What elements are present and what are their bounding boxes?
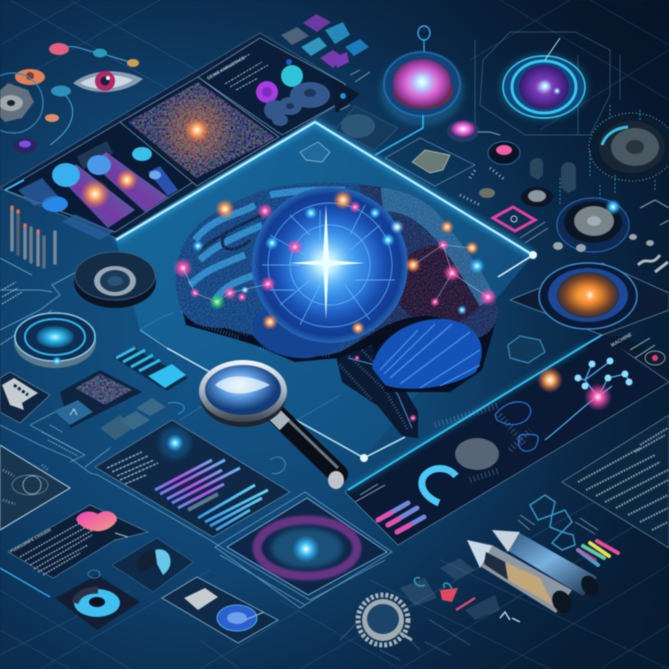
- icon: gear: [0, 73, 43, 133]
- icon: eye: [73, 71, 143, 92]
- bottom sketches: [340, 558, 520, 660]
- small emblem top of band: [508, 336, 545, 363]
- violet orb: [499, 38, 589, 121]
- top small tiles: [281, 14, 369, 68]
- fingerprint disc: [455, 438, 499, 470]
- panel: circular diagram left: [0, 445, 70, 530]
- heading: panel title: GENIC ANNUSTACE: [206, 55, 246, 81]
- node: teal: [93, 48, 107, 58]
- dark lens top right: [589, 113, 669, 181]
- cyan stripe: [0, 568, 50, 597]
- icon: hexagon molecule: [530, 495, 575, 550]
- icon: magnifying glass: [199, 360, 344, 489]
- panel: top-left dark band: [0, 33, 345, 240]
- squiggle icon: [638, 255, 668, 272]
- panel: orange lens: [510, 263, 669, 335]
- colored bars: [578, 541, 618, 565]
- heading: card title: PUDIGUINIFE CASUDN: [9, 527, 52, 554]
- data tile cluster: [54, 370, 184, 440]
- panel: central diamond: [116, 122, 537, 462]
- panel: particle heat map: [120, 76, 280, 187]
- pink square icon: [493, 207, 548, 243]
- brain cortex: [176, 182, 498, 356]
- pink orb: [375, 26, 464, 155]
- icon: brain emblem: [412, 150, 450, 173]
- node: orange ring: [15, 69, 45, 85]
- icon: gears: [264, 82, 330, 126]
- neuron tree: [537, 358, 632, 440]
- node: purple: [13, 138, 37, 154]
- small card right: [640, 200, 669, 225]
- bar cylinders: [12, 207, 55, 267]
- panel: lens tile: [162, 577, 278, 643]
- cerebellum: [372, 319, 482, 389]
- central circuit sphere: [252, 187, 408, 343]
- glowing band edge: [348, 335, 602, 490]
- arc marker: [270, 457, 285, 474]
- pen: blue: [492, 530, 602, 600]
- text scraps: [518, 515, 598, 534]
- brain: [170, 175, 505, 438]
- panel: lower right dark band: [345, 335, 669, 545]
- small pink orb: [447, 120, 500, 142]
- pen: tan: [467, 540, 576, 617]
- lens: dark: [74, 252, 156, 308]
- lens small grey: [521, 187, 553, 207]
- node: teal large: [51, 86, 71, 96]
- dot cloud: [435, 405, 530, 480]
- bars: [378, 503, 424, 532]
- panel: chart with glowing pills: [5, 122, 196, 240]
- small list: [42, 425, 80, 456]
- brain stem: [335, 345, 418, 438]
- panel: pie tile: [112, 538, 193, 592]
- left mid frames: [0, 258, 80, 345]
- panel: small top right card: [600, 332, 669, 378]
- circuit frame: [475, 32, 620, 135]
- panel: data bars: [95, 420, 290, 537]
- label: card title: MACHINE: [610, 332, 634, 349]
- panel: text and gears: [198, 38, 345, 135]
- icon: cog: [358, 595, 412, 645]
- lens: grey: [557, 198, 629, 252]
- wires with dots: [560, 105, 655, 205]
- icon tile: white blocks panel: [0, 372, 50, 423]
- node: orange small: [45, 114, 59, 122]
- lens: cyan: [14, 313, 96, 368]
- glowing panel edge: [116, 122, 533, 255]
- panel: text document: [562, 415, 669, 548]
- dark dotted underside: [178, 290, 497, 392]
- ornament: [479, 188, 495, 198]
- small bolts row: [553, 234, 654, 252]
- panel: donut tile: [55, 570, 140, 630]
- top centre icon: small brain sketch: [300, 142, 330, 162]
- panel: galaxy: [215, 492, 392, 608]
- small icon frame: [385, 138, 475, 186]
- node: pink: [49, 43, 69, 55]
- figures: [530, 158, 576, 193]
- lower lobe: [253, 305, 344, 358]
- hand outline: [495, 402, 538, 451]
- panel and small icons upper middle: [335, 70, 398, 150]
- left icons cluster: [0, 43, 143, 154]
- panel: heart card: [8, 505, 148, 578]
- node: gold: [127, 59, 139, 67]
- mini list: [2, 282, 22, 304]
- dots and small marks: [460, 168, 505, 205]
- thin frame lines: [0, 412, 385, 605]
- node glows: [173, 190, 497, 335]
- cyan bar tile: [113, 348, 188, 391]
- gauge: [422, 468, 456, 503]
- dark ring orb: [488, 142, 520, 164]
